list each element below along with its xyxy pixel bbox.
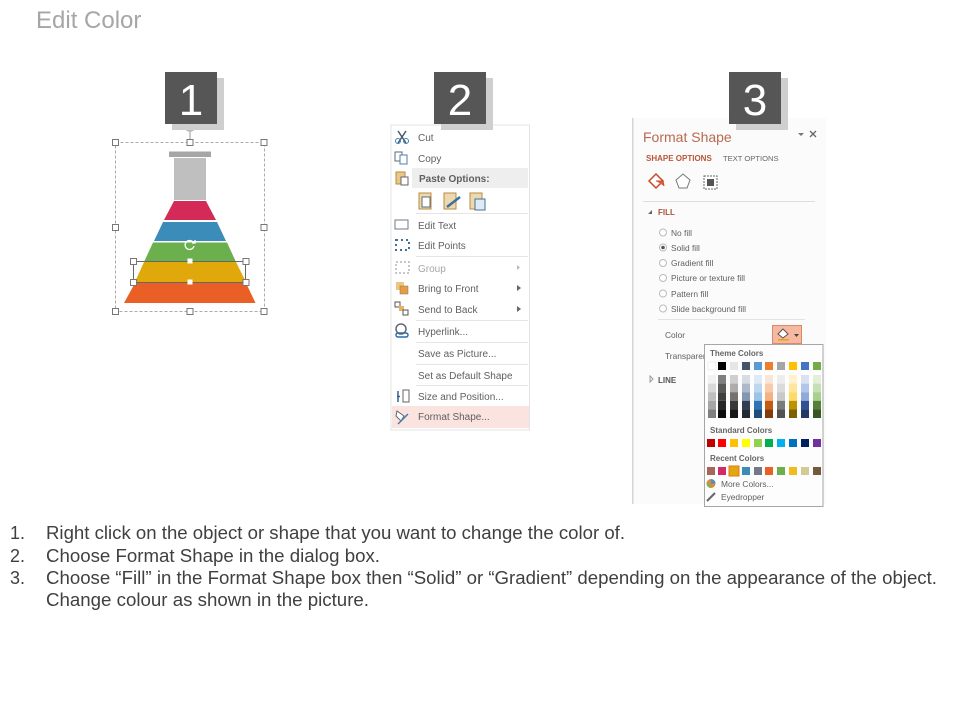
fill radio options: Slide background fill — [671, 304, 746, 314]
title: Edit Color — [36, 7, 141, 34]
theme shades — [708, 375, 821, 418]
menu separators — [416, 214, 528, 386]
menu labels: Save as Picture... — [418, 349, 496, 360]
fill section heading: FILL — [658, 208, 675, 217]
pane background — [632, 118, 826, 504]
menu labels — [418, 133, 513, 423]
badge 3: 3 — [743, 76, 767, 125]
instructions list: 3. — [10, 568, 25, 588]
color row — [665, 326, 802, 361]
standard swatches — [707, 439, 821, 447]
pane tab icons — [649, 174, 717, 189]
menu labels: Paste Options: — [419, 174, 490, 185]
badge 2 — [434, 72, 493, 130]
badge 2: 2 — [448, 76, 472, 125]
menu labels: Edit Points — [418, 241, 466, 252]
menu labels: Format Shape... — [418, 412, 490, 423]
selection frame — [116, 121, 264, 312]
fill radio options: Pattern fill — [671, 289, 708, 299]
more colors: More Colors... — [721, 479, 774, 489]
pane heading: Format Shape — [643, 129, 732, 145]
badge 1: 1 — [179, 76, 203, 125]
panel: step 3 format shape — [632, 118, 826, 506]
flask — [124, 152, 256, 303]
theme top row — [708, 362, 821, 370]
menu labels: Size and Position... — [418, 392, 504, 403]
menu arrows — [517, 265, 521, 312]
eyedropper: Eyedropper — [721, 492, 765, 502]
line section heading — [650, 376, 677, 385]
panel: step 2 context menu — [391, 125, 530, 430]
menu labels: Hyperlink... — [418, 327, 468, 338]
color dropdown — [704, 344, 823, 506]
badge 1 — [165, 72, 224, 130]
menu labels: Bring to Front — [418, 284, 479, 295]
menu highlights — [392, 168, 529, 428]
fill radio options: No fill — [671, 228, 692, 238]
color row: Color — [665, 330, 685, 340]
pane tabs: SHAPE OPTIONS — [646, 154, 712, 163]
instructions list: Change colour as shown in the picture. — [46, 590, 369, 610]
fill radio options — [660, 228, 746, 314]
instructions list: 2. — [10, 546, 25, 566]
theme colors label: Theme Colors — [710, 349, 764, 358]
fill radio options: Solid fill — [671, 243, 700, 253]
pane close controls — [798, 131, 816, 137]
instructions list: Choose “Fill” in the Format Shape box then “Solid” or “Gradient” depending on the appearance of the object. — [46, 568, 937, 588]
recent swatches — [707, 466, 821, 476]
menu labels: Cut — [418, 133, 434, 144]
menu icons — [395, 131, 485, 424]
menu background — [391, 125, 530, 430]
pane tabs — [646, 154, 779, 163]
menu labels: Group — [418, 264, 446, 275]
badge 3 — [729, 72, 788, 130]
menu labels: Edit Text — [418, 221, 456, 232]
recent colors label: Recent Colors — [710, 454, 765, 463]
color row: Transparen — [665, 351, 708, 361]
dropdown box — [704, 344, 823, 506]
instructions list: Choose Format Shape in the dialog box. — [46, 546, 380, 566]
pane divider lower — [658, 318, 805, 320]
menu labels: Send to Back — [418, 305, 478, 316]
panel: step 1 flask selection — [112, 121, 267, 314]
line section heading: LINE — [658, 376, 677, 385]
instructions list: Right click on the object or shape that you want to change the color of. — [46, 523, 625, 543]
pane divider — [643, 200, 815, 202]
fill radio options: Picture or texture fill — [671, 273, 745, 283]
menu labels: Set as Default Shape — [418, 371, 513, 382]
fill radio options: Gradient fill — [671, 258, 713, 268]
selection handles — [112, 140, 267, 314]
instructions list: 1. — [10, 523, 25, 543]
standard colors label: Standard Colors — [710, 426, 773, 435]
menu labels: Copy — [418, 154, 441, 165]
fill section heading — [648, 208, 675, 217]
instructions list — [10, 523, 937, 610]
pane tabs: TEXT OPTIONS — [723, 154, 779, 163]
